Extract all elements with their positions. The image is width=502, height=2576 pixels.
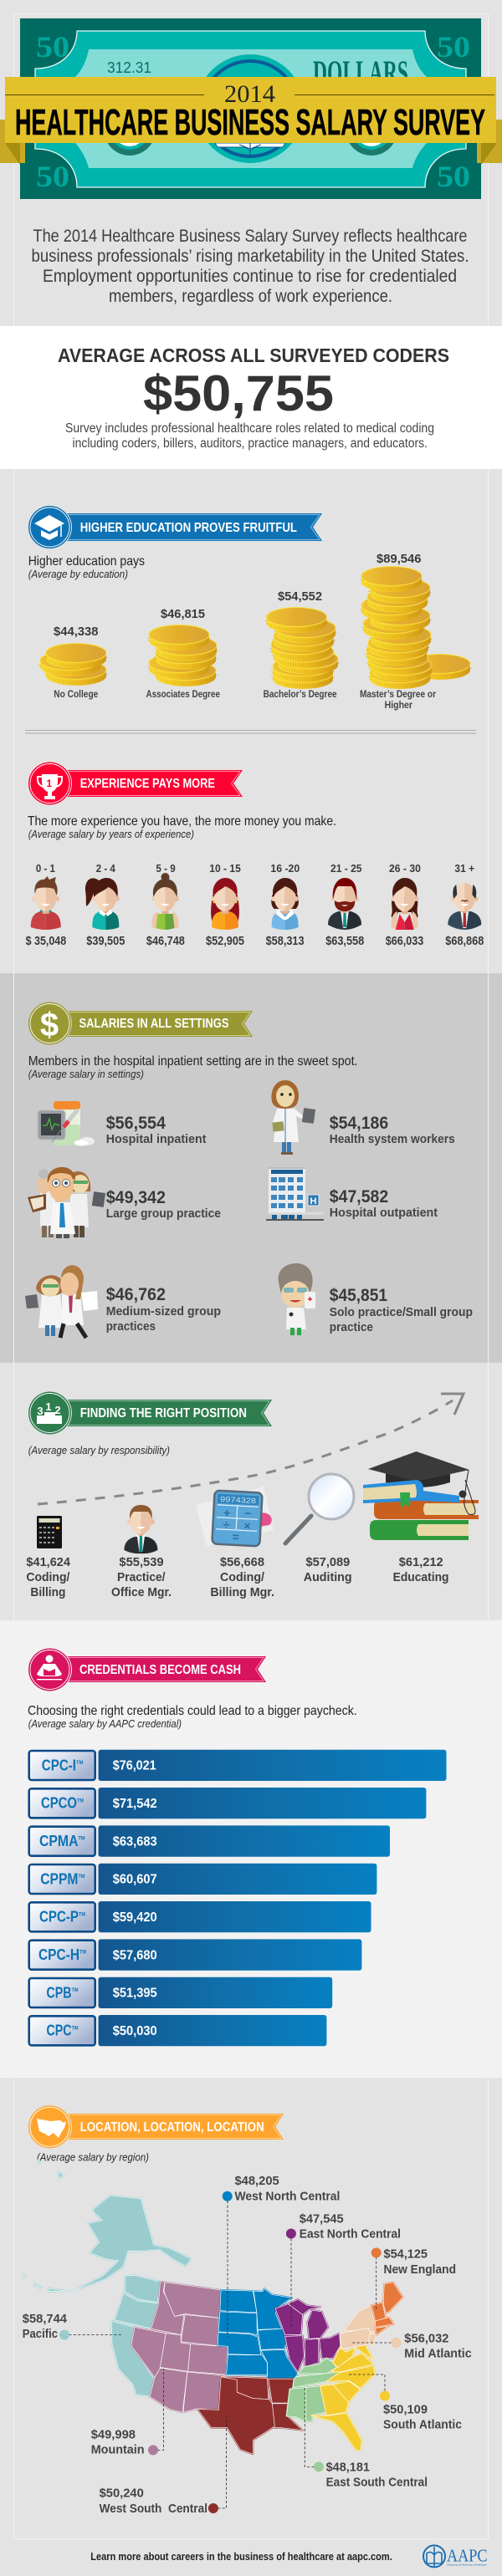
- bar: CPC-P: CPC-P: [39, 1908, 79, 1926]
- coin stack: master's degree or higher: [360, 553, 470, 711]
- text: practice office manager: Practice/: [117, 1570, 166, 1584]
- avatar column: 31+ years: [445, 862, 484, 948]
- icon: two doctors: [25, 1265, 98, 1338]
- icon: blue calculator on papers: [196, 1487, 274, 1546]
- callout: West North Central: West North Central: [234, 2189, 340, 2204]
- avatar column: 21-25 years: [325, 862, 364, 948]
- coin stack: bachelor's degree: $54,552: [278, 590, 322, 604]
- avatar column: 2-4 years: $39,505: [86, 935, 125, 948]
- title banner: 2014: [224, 80, 275, 108]
- text: educating: $61,212: [399, 1555, 443, 1569]
- callout: New England: $54,125: [383, 2247, 428, 2262]
- callout: New England: New England: [383, 2262, 456, 2277]
- ribbon: higher education proves fruitful: HIGHER EDUCATION PROVES FRUITFUL: [80, 521, 297, 535]
- bar: CPC-H: CPC-H: [38, 1946, 79, 1963]
- avatar column: 26-30 years: [386, 862, 423, 948]
- icon: hospital building: [266, 1167, 324, 1221]
- intro text block: Employment opportunities continue to rise for credentialed: [43, 267, 457, 286]
- ribbon: salaries in all settings: SALARIES IN ALL SETTINGS: [79, 1017, 229, 1031]
- text: hospital inpatient: [106, 1114, 206, 1146]
- avatar column: 26-30 years: $66,033: [386, 935, 423, 948]
- ribbon: salaries in all settings: [28, 1002, 253, 1045]
- panel: credentials become cash: Choosing the right credentials could lead to a bigger paycheck.: [28, 1704, 357, 1718]
- avatar column: 21-25 years: 21 - 25: [330, 862, 361, 875]
- bar: CPCO: [29, 1788, 426, 1819]
- icon: books and graduation cap: [363, 1451, 479, 1540]
- callout: Pacific: $58,744: [23, 2312, 68, 2326]
- callout: East North Central: [286, 2212, 401, 2327]
- callout: South Atlantic: South Atlantic: [383, 2417, 462, 2431]
- coin stack: master's degree or higher: Higher: [385, 699, 412, 711]
- callout: West South Central: [100, 2416, 227, 2516]
- text: coding billing manager: Coding/: [220, 1570, 265, 1584]
- panel: salaries in all settings: (Average salary in settings): [28, 1069, 144, 1080]
- text: large group practice: Large group practice: [106, 1206, 221, 1221]
- coin stack: bachelor's degree: [264, 590, 338, 700]
- ribbon: location location location: LOCATION, LOCATION, LOCATION: [80, 2120, 264, 2135]
- avatar column: 10-15 years: 10 - 15: [209, 862, 241, 875]
- text: coding billing manager: Billing Mgr.: [210, 1585, 274, 1599]
- avatar column: 31+ years: $68,868: [445, 935, 484, 948]
- banknote illustration: [20, 18, 481, 199]
- text: solo practice: $45,851: [330, 1286, 387, 1305]
- callout: Mid Atlantic: [352, 2331, 472, 2361]
- map region: East South Central: [287, 2358, 340, 2421]
- ribbon: higher education proves fruitful: [28, 505, 322, 549]
- banknote illustration: 50: [36, 160, 69, 193]
- text: hospital inpatient: Hospital inpatient: [106, 1132, 206, 1146]
- ribbon: experience pays more: 1: [47, 778, 52, 789]
- icon: blue calculator on papers: 9974328: [220, 1495, 256, 1505]
- bar: CPCO: CPCO: [41, 1794, 77, 1812]
- bar: CPMA: CPMA: [39, 1832, 79, 1849]
- ribbon: experience pays more: EXPERIENCE PAYS MORE: [80, 777, 215, 791]
- text: hospital inpatient: $56,554: [106, 1114, 166, 1133]
- icon: medical jar and monitor: [38, 1101, 95, 1145]
- bar: CPMA: [29, 1825, 390, 1857]
- bar: CPC-P: [29, 1901, 371, 1932]
- callout: East North Central: East North Central: [300, 2227, 401, 2242]
- panel: credentials become cash: (Average salary by AAPC credential): [28, 1718, 182, 1730]
- panel: finding the right position: (Average salary by responsibility): [28, 1445, 170, 1456]
- callout: Mountain: $49,998: [91, 2427, 136, 2441]
- icon: magnifying glass: [285, 1474, 354, 1543]
- ribbon: finding the right position: [28, 1391, 272, 1435]
- bar: CPMA: TM: [79, 1836, 85, 1842]
- avatar column: 2-4 years: [85, 862, 125, 948]
- ribbon: finding the right position: 2: [54, 1404, 61, 1416]
- callout: East South Central: $48,181: [326, 2461, 370, 2475]
- avatar column: 5-9 years: [146, 862, 185, 948]
- callout: Pacific: [23, 2312, 123, 2341]
- ribbon: experience pays more: [28, 761, 243, 806]
- avatar column: 31+ years: 31 +: [454, 862, 474, 875]
- panel: experience pays more: [26, 761, 484, 948]
- panel: finding the right position: [0, 1363, 502, 1620]
- avatar column: 16-20 years: $58,313: [266, 935, 305, 948]
- panel: salaries in all settings: [0, 973, 502, 1363]
- text: solo practice: [330, 1286, 473, 1334]
- avatar column: 10-15 years: [206, 862, 244, 948]
- panel: salaries in all settings: Members in the hospital inpatient setting are in the sweet spot.: [28, 1054, 357, 1069]
- text: large group practice: $49,342: [106, 1188, 166, 1207]
- map region: Mountain: [131, 2282, 228, 2412]
- bar: CPC-I: TM: [76, 1760, 84, 1766]
- banknote illustration: 50: [437, 160, 470, 193]
- map region: Pacific: [23, 2160, 192, 2396]
- bar: CPB: CPB: [47, 1983, 72, 2001]
- title banner: [0, 77, 502, 165]
- intro text block: members, regardless of work experience.: [109, 287, 392, 306]
- bar: CPC-P: TM: [79, 1911, 85, 1917]
- panel: credentials become cash: [0, 1620, 502, 2078]
- panel: average salary: $50,755: [143, 365, 334, 421]
- text: health system workers: [330, 1114, 455, 1146]
- panel: average salary: including coders, billers, auditors, practice managers, and educators.: [72, 436, 428, 451]
- logo: AAPC: [423, 2545, 487, 2568]
- callout: Mountain: Mountain: [91, 2442, 145, 2456]
- bar: CPC: CPC: [47, 2022, 72, 2039]
- callout: Pacific: Pacific: [23, 2327, 58, 2341]
- text: coding billing manager: $56,668: [220, 1555, 264, 1569]
- bar: CPC-I: CPC-I: [42, 1756, 76, 1773]
- panel: higher education: [0, 469, 502, 973]
- bar: CPC-P: $59,420: [113, 1910, 157, 1925]
- icon: blue calculator on papers: ×: [243, 1518, 251, 1533]
- text: coding billing: Coding/: [26, 1570, 70, 1584]
- map region: West North Central: [218, 2288, 298, 2380]
- text: medium-sized group practices: Medium-sized group: [106, 1304, 221, 1319]
- icon: female doctor with x-ray: [271, 1080, 315, 1155]
- intro text block: [32, 227, 469, 306]
- text: solo practice: Solo practice/Small group: [330, 1305, 473, 1319]
- avatar column: 10-15 years: $52,905: [206, 935, 244, 948]
- bar: CPC: TM: [72, 2025, 79, 2031]
- text: educating: Educating: [393, 1570, 448, 1584]
- callout: East South Central: East South Central: [326, 2476, 428, 2490]
- bar: CPCO: TM: [77, 1798, 84, 1803]
- bar: CPC-H: TM: [79, 1950, 86, 1956]
- text: health system workers: $54,186: [330, 1114, 388, 1133]
- text: coding billing manager: [210, 1555, 274, 1599]
- bar: CPC-H: $57,680: [113, 1948, 157, 1962]
- text: medium-sized group practices: [106, 1285, 221, 1334]
- banknote illustration: 50: [36, 30, 69, 64]
- panel: experience pays more: The more experience you have, the more money you make.: [28, 814, 336, 829]
- ribbon: finding the right position: 1: [45, 1400, 52, 1413]
- avatar column: 5-9 years: $46,748: [146, 935, 185, 948]
- map region: East North Central: [275, 2299, 341, 2372]
- text: medium-sized group practices: practices: [106, 1319, 156, 1334]
- callout: East South Central: [305, 2387, 428, 2490]
- text: practice office manager: $55,539: [119, 1555, 164, 1569]
- ribbon: location location location: [28, 2104, 284, 2149]
- icon: calculator: [37, 1516, 62, 1548]
- logo: AAPC: Advancing the Business of Healthcare: [447, 2563, 487, 2567]
- text: hospital outpatient: $47,582: [330, 1187, 388, 1206]
- bar: CPB: TM: [72, 1987, 79, 1993]
- avatar column: 26-30 years: 26 - 30: [389, 862, 421, 875]
- avatar column: 0-1 years: [26, 862, 66, 948]
- coin stack: associates degree: Associates Degree: [146, 688, 220, 700]
- panel: location: [0, 2078, 502, 2576]
- bar: CPPM: CPPM: [40, 1870, 79, 1887]
- bar: CPPM: $60,607: [113, 1873, 157, 1887]
- coin stack: no college: No College: [54, 688, 99, 700]
- text: hospital outpatient: [330, 1187, 438, 1220]
- panel: header background: [0, 0, 502, 326]
- banknote illustration: 50: [437, 30, 470, 64]
- text: auditing: [304, 1555, 352, 1584]
- ribbon: finding the right position: 3: [37, 1405, 44, 1417]
- text: coding billing: Billing: [30, 1585, 65, 1599]
- map: United States regions: [23, 2160, 402, 2454]
- callout: Mountain: [91, 2369, 164, 2456]
- callout: New England: [371, 2247, 456, 2310]
- coin stack: associates degree: [146, 608, 220, 700]
- callout: West South Central: West South Central: [100, 2502, 207, 2516]
- avatar column: 2-4 years: 2 - 4: [96, 862, 115, 875]
- icon: blue calculator on papers: +: [223, 1506, 231, 1520]
- text: solo practice: practice: [330, 1320, 373, 1334]
- panel: average salary: AVERAGE ACROSS ALL SURVEYED CODERS: [58, 344, 449, 366]
- logo: AAPC: AAPC: [447, 2546, 487, 2566]
- avatar column: 21-25 years: $63,558: [325, 935, 364, 948]
- callout: Mid Atlantic: $56,032: [404, 2331, 448, 2346]
- footer call to action: Learn more about careers in the business of healthcare at aapc.com.: [90, 2551, 392, 2563]
- panel: average salary: [0, 326, 502, 469]
- callout: East North Central: $47,545: [300, 2212, 344, 2226]
- ribbon: finding the right position: FINDING THE RIGHT POSITION: [80, 1406, 247, 1421]
- ribbon: salaries in all settings: $: [40, 1007, 59, 1043]
- avatar column: 5-9 years: 5 - 9: [156, 862, 176, 875]
- bar: CPC-I: $76,021: [113, 1759, 156, 1773]
- avatar column: 0-1 years: $ 35,048: [26, 935, 66, 948]
- text: medium-sized group practices: $46,762: [106, 1285, 166, 1304]
- icon: doctor with glasses: [279, 1263, 315, 1335]
- callout: West South Central: $50,240: [100, 2487, 144, 2501]
- map region: South Atlantic: [311, 2344, 376, 2451]
- banknote illustration: DOLLARS: [313, 54, 408, 91]
- callout: West North Central: [223, 2174, 340, 2338]
- icon: hospital building: H: [310, 1196, 317, 1206]
- text: coding billing: [26, 1555, 71, 1599]
- bar: CPPM: TM: [79, 1874, 85, 1880]
- text: health system workers: Health system workers: [330, 1132, 455, 1146]
- text: coding billing: $41,624: [26, 1555, 71, 1569]
- callout: South Atlantic: [347, 2375, 462, 2431]
- text: auditing: Auditing: [304, 1570, 352, 1584]
- panel: average salary: Survey includes professional healthcare roles related to medical coding: [65, 421, 434, 436]
- bar: CPCO: $71,542: [113, 1797, 157, 1811]
- bar: CPC: [29, 2015, 326, 2046]
- bar: CPC: $50,030: [113, 2024, 157, 2038]
- bar: CPB: $51,395: [113, 1987, 157, 2001]
- bar: CPC-H: [29, 1939, 361, 1971]
- icon: blue calculator on papers: ÷: [223, 1518, 230, 1532]
- text: educating: [393, 1555, 448, 1584]
- bar chart: salary by credential: [29, 1750, 446, 2046]
- coin stack: master's degree or higher: Master’s Degree or: [360, 688, 436, 700]
- bar: CPC-I: [29, 1750, 446, 1781]
- coin stack: master's degree or higher: $89,546: [376, 553, 422, 566]
- callout: West North Central: $48,205: [234, 2174, 279, 2188]
- coin stack: no college: $44,338: [54, 625, 99, 639]
- banknote illustration: 312.31: [107, 59, 151, 76]
- text: hospital outpatient: Hospital outpatient: [330, 1206, 438, 1220]
- icon: blue calculator on papers: −: [244, 1506, 252, 1520]
- map region: New England: [371, 2283, 402, 2335]
- callout: Mid Atlantic: Mid Atlantic: [404, 2347, 472, 2361]
- text: large group practice: [106, 1188, 221, 1221]
- icon: group of three doctors: [28, 1167, 105, 1238]
- panel: higher education: (Average by education): [28, 569, 128, 580]
- map region: West South Central: [197, 2377, 303, 2454]
- text: practice office manager: [111, 1555, 172, 1599]
- map region: Mid Atlantic: [340, 2305, 376, 2349]
- avatar column: 0-1 years: 0 - 1: [36, 862, 55, 875]
- panel: experience pays more: (Average salary by years of experience): [28, 829, 194, 840]
- text: auditing: $57,089: [306, 1555, 350, 1569]
- text: practice office manager: Office Mgr.: [111, 1585, 172, 1599]
- coin stack: bachelor's degree: Bachelor’s Degree: [264, 688, 337, 700]
- bar: CPB: [29, 1977, 332, 2008]
- coin stack: no college: [40, 625, 106, 700]
- icon: office manager avatar: [124, 1505, 157, 1553]
- callout: South Atlantic: $50,109: [383, 2403, 428, 2417]
- panel: higher education: Higher education pays: [28, 554, 145, 569]
- ribbon: credentials become cash: [28, 1647, 266, 1692]
- avatar column: 16-20 years: [266, 862, 305, 948]
- bar: CPPM: [29, 1864, 376, 1895]
- coin stack: associates degree: $46,815: [161, 608, 205, 621]
- panel: location: (Average salary by region): [37, 2151, 149, 2163]
- avatar column: 16-20 years: 16 -20: [270, 862, 300, 875]
- bar: CPMA: $63,683: [113, 1834, 157, 1849]
- ribbon: credentials become cash: CREDENTIALS BECOME CASH: [79, 1663, 241, 1677]
- icon: blue calculator on papers: =: [232, 1530, 239, 1543]
- arrow: rising dashed trend: [38, 1394, 464, 1504]
